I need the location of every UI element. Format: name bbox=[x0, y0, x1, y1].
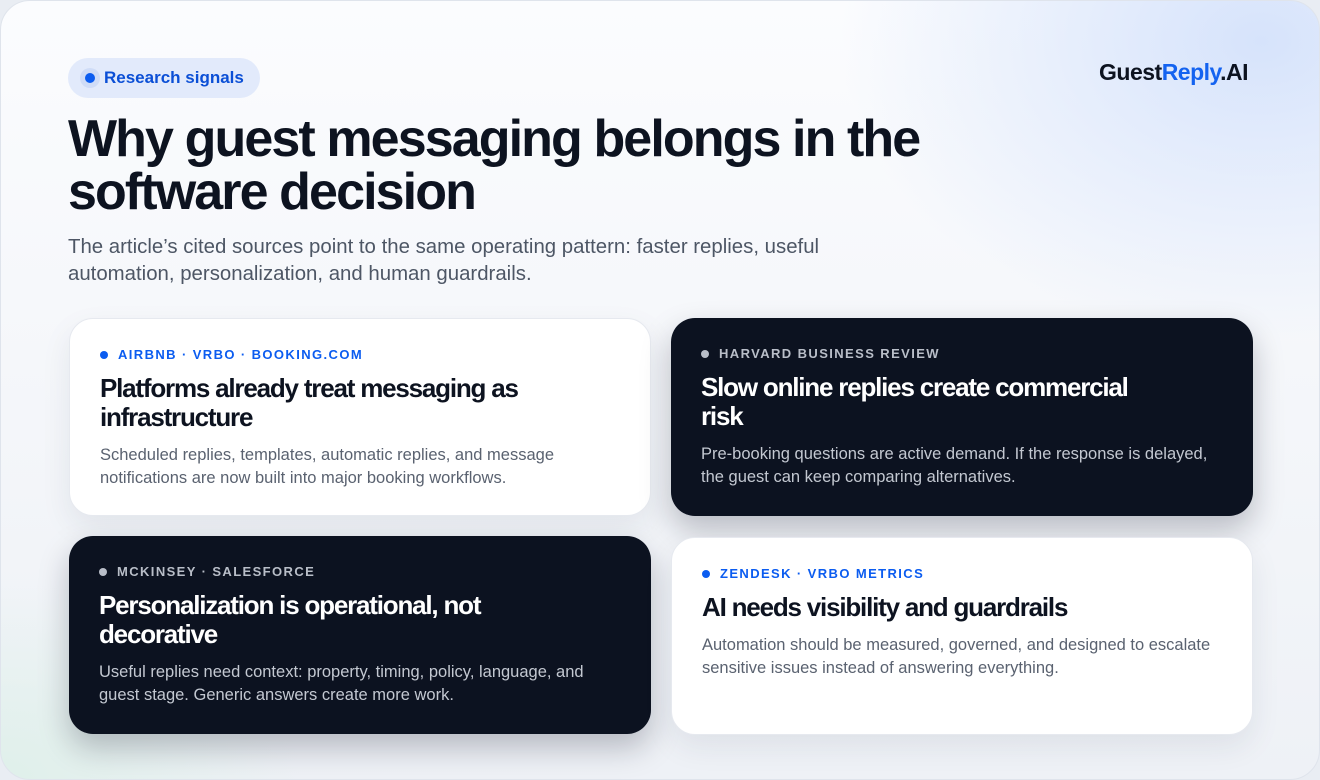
panel: slow replies: HARVARD BUSINESS REVIEW bbox=[719, 346, 940, 361]
panel: platforms: Platforms already treat messaging as infrastructure bbox=[100, 373, 518, 432]
panel: personalization bbox=[69, 536, 651, 734]
panel: slow replies: Slow online replies create commercial risk bbox=[701, 372, 1128, 431]
panel: AI guardrails: Automation should be measured, governed, and designed to escalate sensitive issues instead of answering everything. bbox=[702, 636, 1210, 677]
title: Why guest messaging belongs in the software decision bbox=[68, 110, 919, 221]
panel: AI guardrails bbox=[671, 537, 1253, 735]
pill: research signals: Research signals bbox=[104, 68, 244, 87]
panel: personalization: Personalization is operational, not decorative bbox=[99, 590, 480, 649]
panel: platforms: Scheduled replies, templates, automatic replies, and message notifications are now built into major booking workflows. bbox=[100, 446, 554, 487]
subtitle: The article’s cited sources point to the same operating pattern: faster replies, useful automation, personalization, and human guardrails. bbox=[68, 236, 819, 285]
panel: platforms: AIRBNB · VRBO · BOOKING.COM bbox=[118, 347, 363, 362]
panel: platforms bbox=[69, 318, 651, 516]
panel: slow replies: Pre-booking questions are active demand. If the response is delayed, the guest can keep comparing alternatives. bbox=[701, 445, 1207, 486]
panel: slow replies bbox=[671, 318, 1253, 516]
pill: research signals bbox=[68, 58, 260, 98]
panel: AI guardrails: AI needs visibility and guardrails bbox=[702, 592, 1067, 622]
panel: personalization: MCKINSEY · SALESFORCE bbox=[117, 564, 315, 579]
panel: AI guardrails: ZENDESK · VRBO METRICS bbox=[720, 566, 924, 581]
logo: GuestReply.AI bbox=[1099, 59, 1248, 85]
panel: personalization: Useful replies need context: property, timing, policy, language, and guest stage. Generic answers create more work. bbox=[99, 663, 584, 704]
